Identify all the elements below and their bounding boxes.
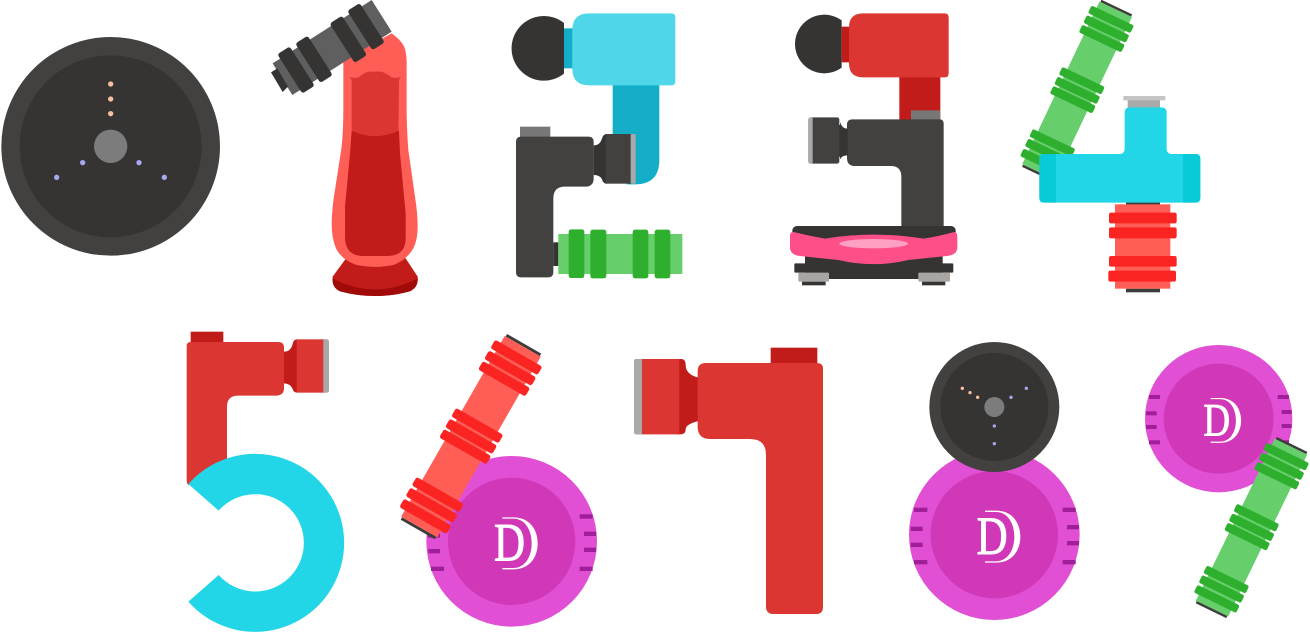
base: [333, 258, 418, 296]
grey strip: [631, 134, 636, 184]
gun neck: [284, 339, 297, 393]
neck: [564, 28, 575, 68]
pink stand: [790, 226, 957, 285]
red stem: [899, 75, 940, 122]
handle: [332, 33, 418, 267]
gun neck: [677, 359, 698, 434]
red roller: [1108, 202, 1177, 292]
ball head: [795, 15, 842, 73]
gun head: [808, 117, 839, 164]
gun head: [634, 359, 679, 434]
dark disc: [929, 342, 1059, 472]
logo: D: [977, 506, 1008, 566]
purple disc: [1145, 345, 1292, 492]
dark gun body: [847, 119, 944, 230]
red head: [849, 13, 949, 77]
neck: [842, 27, 851, 62]
roller attachment: [271, 0, 392, 95]
digit 5: red gun with cyan ring: [187, 332, 344, 632]
grey strip: [808, 117, 813, 164]
tab: [771, 348, 817, 364]
grey tab: [911, 110, 940, 120]
digit 9: purple disc with green roller: [1145, 345, 1310, 621]
gun neck: [594, 134, 607, 184]
green roller: [1016, 0, 1138, 184]
grey strip: [634, 359, 642, 434]
green roller: [558, 229, 682, 278]
purple disc: [909, 449, 1080, 620]
digit 0: massage head disc: [1, 37, 220, 256]
grey cap: [1123, 96, 1165, 108]
cyan ring: [188, 454, 344, 632]
digit 8: purple disc below dark disc: [909, 342, 1080, 620]
digit 3: red massage gun with dark gun and pink base: [790, 13, 957, 285]
connector: [553, 242, 558, 266]
green roller: [1190, 434, 1310, 621]
digit 6: purple disc with red roller: [426, 456, 597, 627]
grey strip: [323, 339, 329, 393]
cyan stem: [613, 83, 659, 184]
red roller of digit 6: [394, 330, 548, 543]
digit 1: handheld massager with roller: [271, 0, 418, 296]
cyan T body: [1039, 107, 1200, 203]
tab: [191, 332, 223, 342]
dark gun body: [516, 137, 594, 277]
gun neck: [840, 122, 848, 159]
cyan head: [572, 13, 675, 85]
gun body: [187, 342, 284, 485]
grey tab: [520, 127, 550, 137]
gun head: [606, 134, 632, 184]
ball head: [512, 16, 564, 81]
digit 7: red massage gun: [634, 348, 823, 614]
gun head: [297, 339, 327, 393]
logo: D: [1203, 394, 1230, 446]
purple disc: [426, 456, 597, 627]
gun body: [698, 363, 823, 614]
logo: D: [494, 513, 525, 573]
digit 2: cyan massage gun with dark gun and green roller: [512, 13, 682, 278]
digit 4: green roller crossing cyan T with red roller: [1016, 0, 1200, 292]
